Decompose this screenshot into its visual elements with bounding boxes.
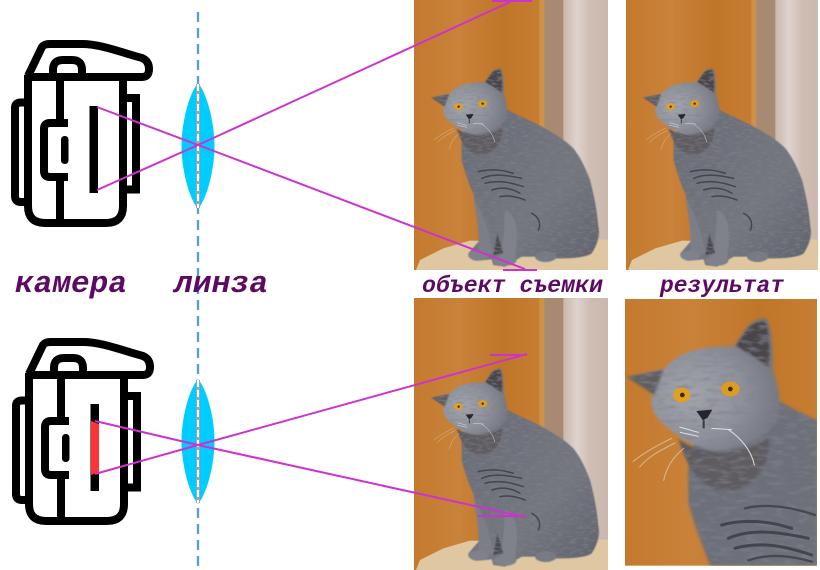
optical axis dashed line [197, 12, 199, 566]
photo: subject, bottom row [414, 297, 608, 570]
icon: camera, bottom [16, 342, 150, 521]
label: lens: линза [172, 267, 268, 302]
label: subject: объект съемки [422, 273, 603, 300]
label: camera: камера [15, 267, 127, 302]
photo: result, top row [626, 0, 820, 270]
rays, bottom [95, 354, 527, 517]
icon: lens, top [182, 83, 214, 209]
icon: lens, bottom [182, 379, 214, 504]
label: result: результат [659, 273, 785, 300]
photo: subject, top row [414, 0, 608, 270]
sensor crop highlight [91, 421, 99, 475]
rays, top [97, 1, 537, 270]
photo: zoomed result, bottom row [625, 299, 817, 566]
icon: camera, top [15, 44, 149, 223]
